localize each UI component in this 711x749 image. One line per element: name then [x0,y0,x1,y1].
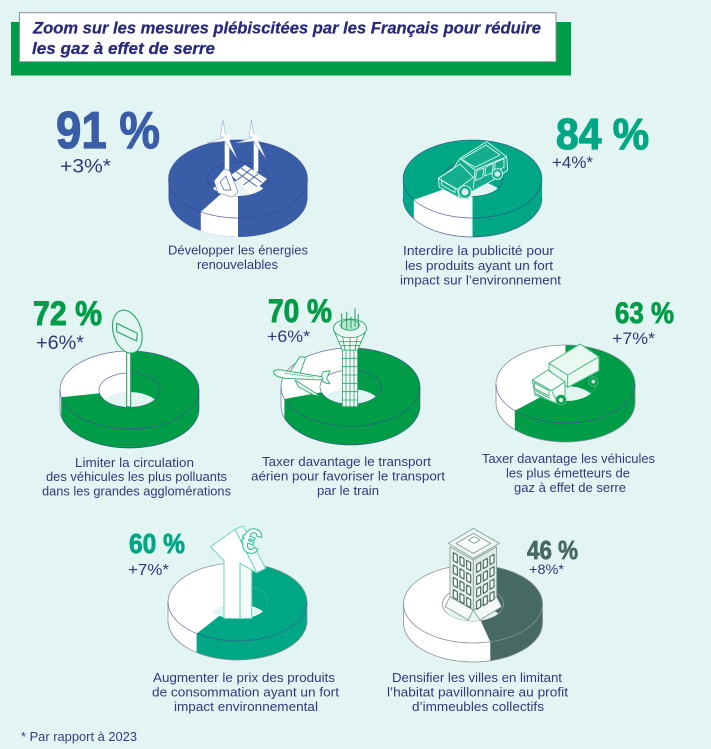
caption: les plus émetteurs de [506,466,630,480]
title: Zoom sur les mesures plébiscitées par les Français pour réduire [32,18,541,38]
donut chart 46 % [404,565,543,662]
caption: Augmenter le prix des produits [153,671,335,685]
donut chart 70 % [281,348,420,445]
caption: l’habitat pavillonnaire au profit [387,686,569,700]
change +7 %: +7%* [612,329,655,348]
caption: Densifier les villes en limitant [392,671,563,685]
title: les gaz à effet de serre [32,39,215,58]
donut chart 72 % [60,351,199,448]
donut chart 84 % [403,140,542,237]
caption: dans les grandes agglomérations [42,484,231,498]
caption: Développer les énergies [168,244,308,258]
caption: Limiter la circulation [75,456,194,470]
donut chart 63 % [496,345,635,442]
percentage 63 %: 63 % [615,297,674,330]
icon: rising arrow with euro sign [211,520,266,618]
caption [42,456,231,498]
icon: wind turbines, solar panel and biomass [207,120,267,197]
panel: circulation 72 % [33,295,231,498]
panel: densifier les villes 46 % [387,528,578,714]
percentage 60 %: 60 % [129,528,185,559]
caption: aérien pour favoriser le transport [251,470,446,484]
icon: no-entry sign [108,307,147,407]
icon: SUV [438,142,508,199]
donut chart 91 % [168,140,308,237]
change +3 %: +3%* [60,156,112,178]
caption: renouvelables [197,258,278,272]
change +4 %: +4%* [552,153,593,172]
caption: d’immeubles collectifs [412,700,544,714]
caption [152,671,340,714]
icon: airplane [273,357,330,396]
icon: control tower [333,308,367,407]
caption: de consommation ayant un fort [152,686,340,700]
caption [251,455,446,498]
caption: gaz à effet de serre [514,481,626,495]
caption: les produits ayant un fort [405,259,554,273]
percentage 84 %: 84 % [556,110,649,159]
caption: Taxer davantage les véhicules [482,452,655,466]
caption: par le train [317,484,379,498]
icon: apartment building [445,528,502,620]
percentage 46 %: 46 % [527,535,578,565]
caption: Taxer davantage le transport [262,455,432,469]
panel: transport aérien 70 % [251,293,446,498]
change +6 %: +6%* [267,327,310,346]
title [11,13,571,75]
donut chart 60 % [168,563,307,660]
change +7 %: +7%* [128,562,169,579]
caption: impact sur l’environnement [400,274,562,288]
caption [400,244,562,288]
footnote: * Par rapport à 2023 [21,730,137,744]
percentage 70 %: 70 % [268,293,332,329]
icon: rising arrow with euro sign: € [236,520,266,563]
icon: truck [532,344,599,405]
change +8 %: +8%* [529,561,565,577]
caption [387,671,569,714]
percentage 72 %: 72 % [33,295,102,333]
panel: véhicules émetteurs 63 % [482,297,674,495]
caption [168,244,308,272]
caption [482,452,655,495]
panel: prix des produits 60 % [128,520,340,714]
caption: des véhicules les plus polluants [46,470,227,484]
change +6 %: +6%* [36,333,85,354]
panel: énergies renouvelables 91 % [56,102,308,272]
panel: publicité 84 % [400,110,649,288]
caption: impact environnemental [174,700,318,714]
caption: Interdire la publicité pour [403,244,554,258]
percentage 91 %: 91 % [56,102,160,160]
